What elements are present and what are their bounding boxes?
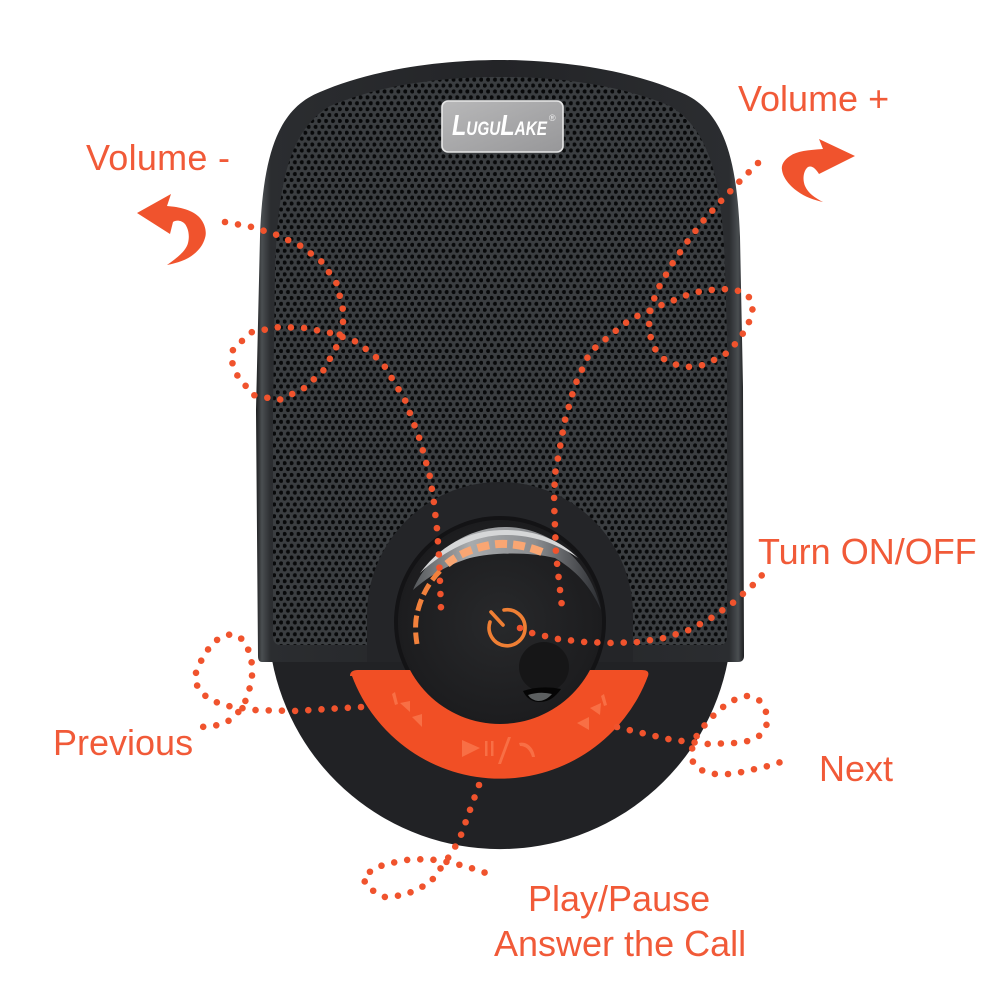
dotted path: volume plus bbox=[554, 163, 758, 607]
dotted path: turn on off bbox=[520, 574, 763, 643]
label: play pause answer the call bbox=[494, 878, 746, 964]
speaker device bbox=[256, 60, 744, 849]
label: play pause answer the call: Answer the Call bbox=[494, 923, 746, 964]
orange control band bbox=[350, 670, 648, 779]
label: play pause answer the call: Play/Pause bbox=[528, 878, 710, 919]
speaker body bbox=[256, 60, 744, 662]
label: turn on off: Turn ON/OFF bbox=[758, 531, 977, 572]
label: volume plus: Volume + bbox=[738, 78, 889, 119]
dotted path: play pause bbox=[363, 785, 492, 897]
dotted path: previous bbox=[196, 634, 361, 727]
label: volume minus: Volume - bbox=[86, 137, 230, 178]
brand badge bbox=[442, 101, 563, 152]
dotted path: next bbox=[617, 696, 781, 774]
previous icon bbox=[392, 692, 422, 727]
speaker grille bbox=[273, 77, 727, 645]
knob gloss bbox=[413, 527, 601, 610]
brand badge: ® bbox=[549, 113, 556, 123]
dotted path: volume minus bbox=[225, 222, 441, 609]
power icon bbox=[489, 610, 525, 646]
microphone recess bbox=[519, 642, 569, 692]
control knob bbox=[398, 520, 602, 724]
label: next: Next bbox=[819, 748, 893, 789]
lower base bbox=[272, 660, 728, 849]
knob collar bbox=[367, 482, 633, 728]
volume indicator lower bbox=[416, 571, 440, 644]
arrow: volume plus bbox=[782, 139, 855, 202]
play pause icon bbox=[462, 737, 535, 764]
brand badge: LUGULAKE bbox=[452, 110, 548, 142]
next icon bbox=[577, 694, 607, 730]
volume indicator upper bbox=[447, 544, 542, 564]
label: previous: Previous bbox=[53, 722, 193, 763]
arrow: volume minus bbox=[137, 194, 206, 265]
